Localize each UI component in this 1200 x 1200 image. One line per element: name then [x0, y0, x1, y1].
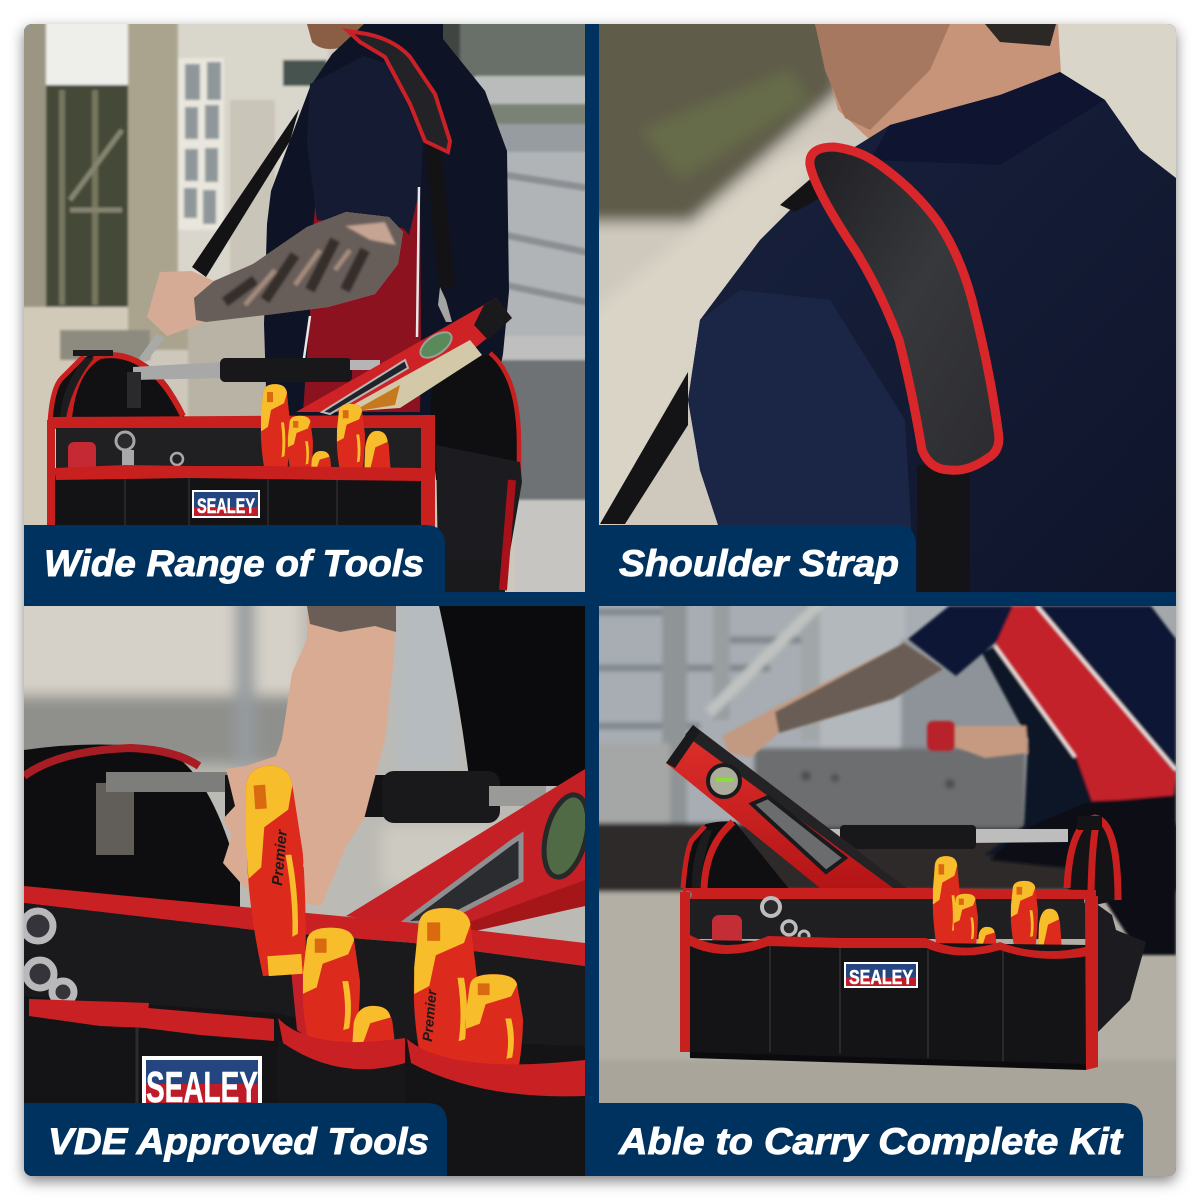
background: blurred yard — [24, 606, 585, 1176]
grid divider: horizontal — [24, 592, 1176, 606]
hand tools — [68, 442, 96, 468]
panel: shoulder strap — [599, 24, 1176, 592]
badge: SEALEY: SEALEY — [197, 495, 255, 518]
grid divider: vertical — [585, 24, 599, 1176]
person: bending worker — [722, 606, 1176, 955]
panel: VDE approved tools — [24, 606, 585, 1176]
panel: wide range of tools — [24, 24, 585, 592]
caption: Shoulder Strap: Shoulder Strap — [619, 543, 899, 584]
neck and head — [815, 24, 1062, 140]
screwdrivers — [303, 908, 523, 1077]
caption: VDE Approved Tools: VDE Approved Tools — [48, 1121, 429, 1162]
pockets: right — [278, 1018, 585, 1103]
bag interior and arch — [24, 744, 546, 930]
held screwdriver: Premier — [269, 828, 291, 886]
pockets: left — [29, 999, 280, 1110]
spirit level — [296, 298, 512, 412]
hand tools — [712, 915, 742, 945]
shoulder pad and straps — [192, 31, 455, 322]
tool bag — [47, 298, 522, 600]
caption: VDE Approved Tools — [24, 1103, 447, 1176]
person: dark trousers — [439, 606, 585, 786]
strap — [600, 175, 970, 592]
background: building and yard — [24, 24, 585, 592]
thumb — [303, 852, 344, 872]
polo shirt — [688, 72, 1176, 592]
badge: SEALEY — [192, 490, 260, 518]
sockets — [23, 911, 74, 1003]
shoulder pad — [810, 147, 999, 470]
badge: SEALEY close-up: SEALEY — [146, 1063, 258, 1112]
badge: SEALEY: SEALEY — [849, 967, 914, 989]
side pocket — [436, 445, 522, 560]
side pocket — [1098, 905, 1146, 1032]
tool bag — [666, 725, 1146, 1070]
right arch — [430, 354, 520, 480]
panel: able to carry complete kit — [599, 606, 1176, 1176]
background: van, bench and ground — [599, 606, 1176, 1176]
badge: SEALEY close-up — [142, 1056, 262, 1103]
badge: SEALEY — [844, 962, 918, 989]
bag front band and webbing — [24, 886, 585, 1176]
handle — [133, 362, 222, 380]
held screwdriver — [246, 766, 308, 1036]
left arch — [52, 356, 184, 417]
caption: Able to Carry Complete Kit — [585, 1103, 1143, 1176]
person: torso and polo shirt — [264, 24, 509, 420]
caption: Wide Range of Tools: Wide Range of Tools — [44, 543, 424, 584]
caption: Shoulder Strap — [585, 525, 916, 592]
right arch — [1067, 818, 1118, 905]
spirit level — [666, 725, 907, 888]
screwdrivers: Premier — [419, 987, 440, 1042]
handle — [770, 829, 1068, 845]
head stubble — [307, 24, 366, 49]
pockets — [688, 940, 1088, 1068]
hand and arm — [223, 606, 396, 906]
left arch — [684, 821, 790, 890]
background: blurred bank and concrete — [599, 24, 1176, 525]
caption: Wide Range of Tools — [24, 525, 445, 592]
pockets — [55, 474, 421, 525]
caption: Able to Carry Complete Kit: Able to Carry Complete Kit — [618, 1121, 1124, 1162]
top band and webbing — [683, 888, 1096, 902]
tattooed arm and hand — [139, 212, 403, 362]
top band — [52, 415, 428, 429]
spirit level close-up — [346, 769, 596, 932]
